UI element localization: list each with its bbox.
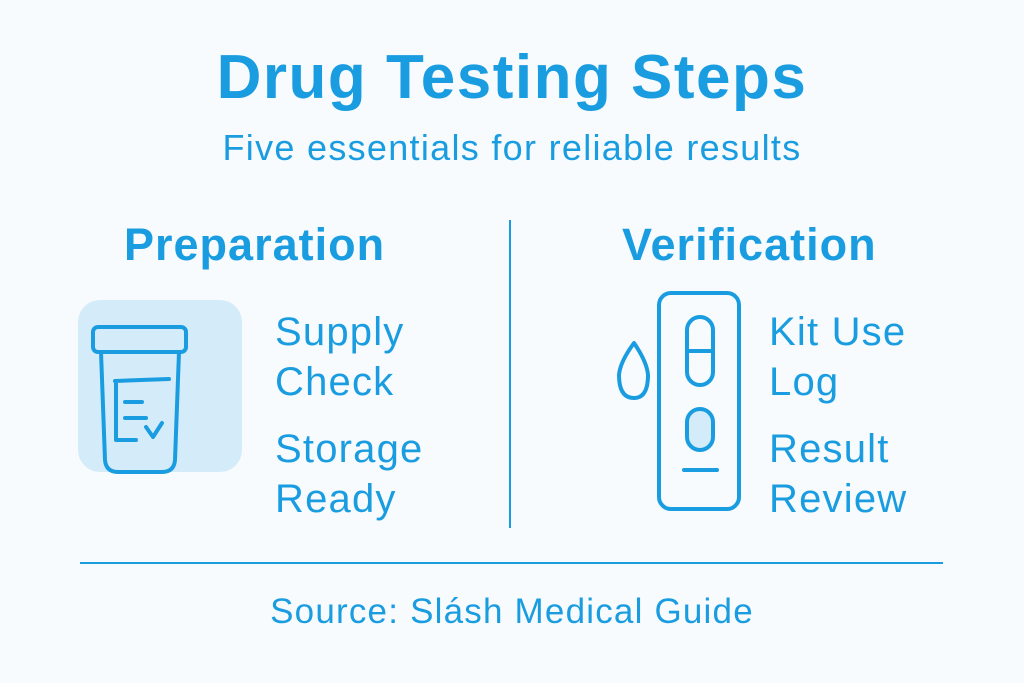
text: preparation items: Supply: [275, 310, 405, 354]
heading: preparation: Preparation: [124, 219, 385, 270]
text: verification items: Log: [769, 360, 839, 404]
text: Review: [769, 477, 907, 521]
text: verification items: [769, 310, 906, 404]
icon: test strip with drop: [619, 293, 739, 509]
text: Storage: [275, 427, 424, 471]
text: verification items: Kit Use: [769, 310, 906, 354]
text: Ready: [275, 477, 397, 521]
icon: specimen jar: [78, 300, 242, 472]
subtitle: Five essentials for reliable results: [222, 127, 802, 168]
text: Result: [769, 427, 890, 471]
title: Drug Testing Steps: [217, 43, 807, 112]
heading: verification: Verification: [622, 219, 877, 270]
text: preparation items: [275, 310, 405, 404]
text: preparation items: Check: [275, 360, 394, 404]
source: Source: Slásh Medical Guide: [270, 592, 754, 631]
